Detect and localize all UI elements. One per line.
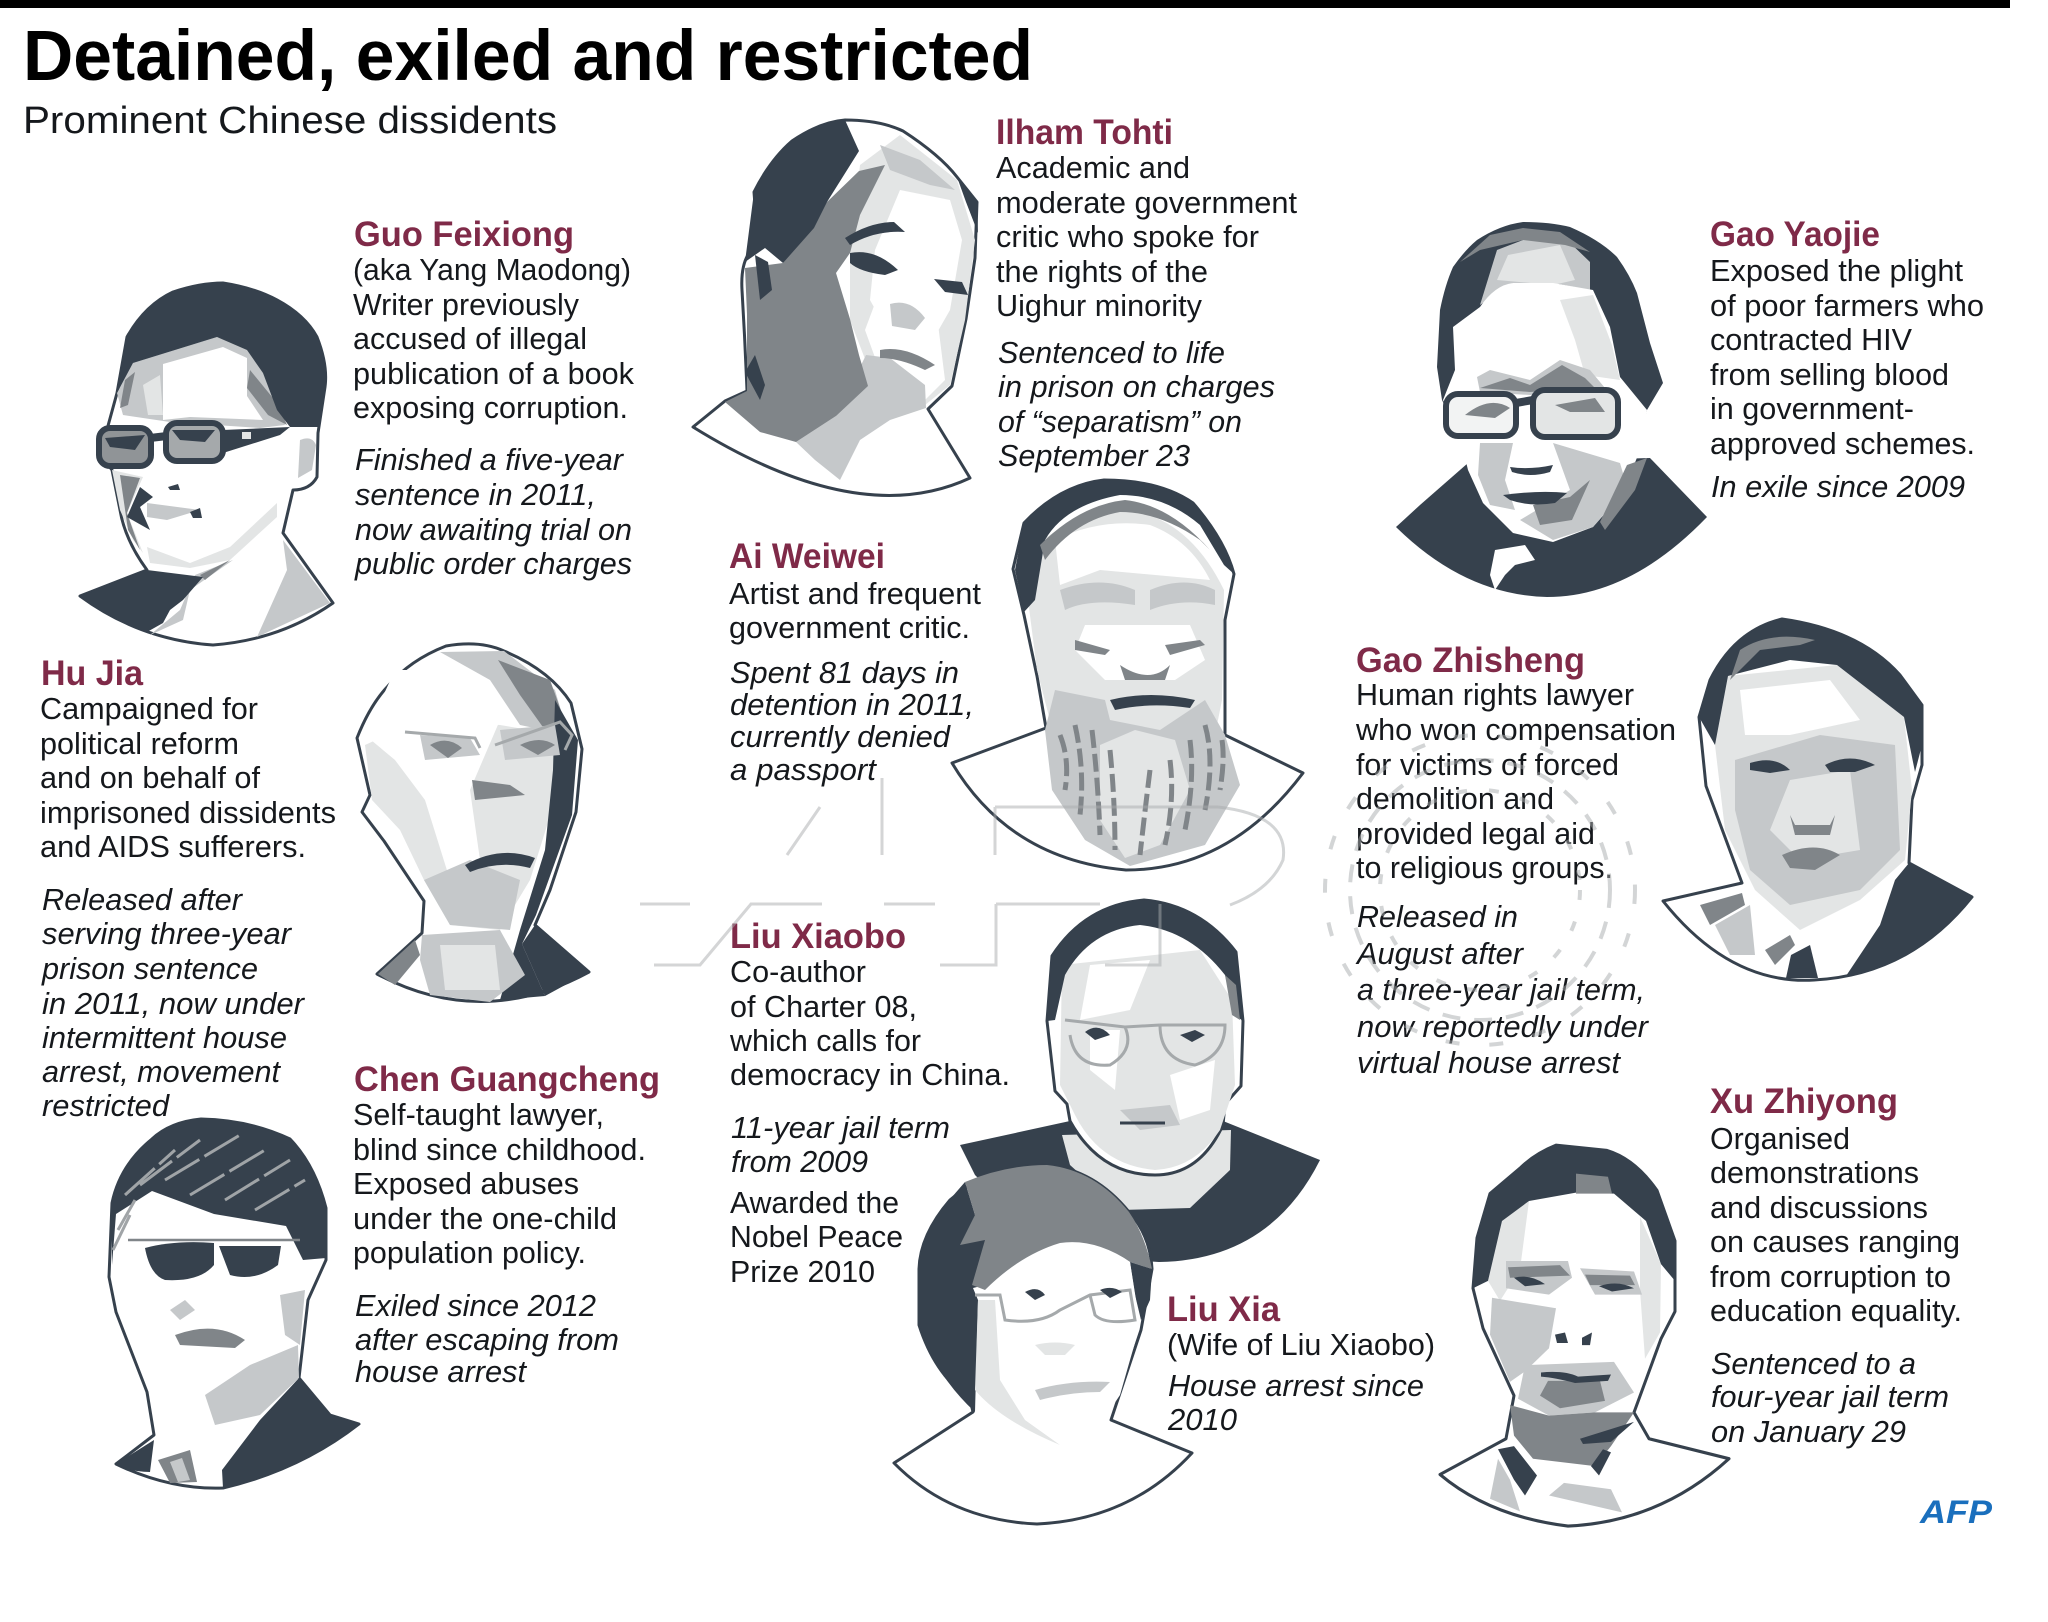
status: virtual house arrest <box>1357 1045 1621 1080</box>
biography: and AIDS sufferers. <box>40 829 306 864</box>
status: in 2011, now under <box>42 986 306 1021</box>
logo: AFP: AFP <box>1919 1494 1993 1530</box>
subtitle: Prominent Chinese dissidents <box>23 100 557 142</box>
biography: Human rights lawyer <box>1356 677 1634 712</box>
biography: from selling blood <box>1710 357 1949 392</box>
award: Nobel Peace <box>730 1219 903 1254</box>
status: Released in <box>1357 899 1518 934</box>
portrait: Ilham Tohti <box>693 120 978 495</box>
panel: Xu Zhiyong <box>1440 1082 1962 1526</box>
biography: who won compensation <box>1355 712 1676 747</box>
status <box>1711 1346 1949 1449</box>
panel: Guo Feixiong <box>80 215 634 645</box>
biography: approved schemes. <box>1710 426 1975 461</box>
biography: contracted HIV <box>1710 322 1912 357</box>
status <box>355 1288 619 1389</box>
name: Ai Weiwei <box>729 537 885 576</box>
biography: Campaigned for <box>40 691 258 726</box>
status: Sentenced to a <box>1711 1346 1916 1381</box>
status: of “separatism” on <box>998 404 1242 439</box>
biography <box>729 576 981 645</box>
status <box>730 655 974 787</box>
biography: (aka Yang Maodong) <box>353 252 631 287</box>
status <box>1355 899 1650 1080</box>
biography: political reform <box>40 726 239 761</box>
panel: Chen Guangcheng <box>109 1060 660 1488</box>
biography: demonstrations <box>1710 1155 1919 1190</box>
biography: accused of illegal <box>353 321 587 356</box>
status: 11-year jail term <box>731 1110 950 1145</box>
panel: Ilham Tohti <box>693 113 1297 495</box>
biography: and discussions <box>1710 1190 1928 1225</box>
panel: Gao Zhisheng <box>1355 619 1972 1080</box>
status: currently denied <box>730 719 952 754</box>
biography: for victims of forced <box>1356 747 1619 782</box>
status: September 23 <box>998 438 1190 473</box>
portrait: Liu Xia <box>894 1165 1192 1524</box>
biography: critic who spoke for <box>996 219 1259 254</box>
status: after escaping from <box>355 1322 619 1357</box>
biography <box>353 1097 646 1270</box>
status: now awaiting trial on <box>355 512 632 547</box>
biography: provided legal aid <box>1356 816 1595 851</box>
status: four-year jail term <box>1711 1379 1949 1414</box>
biography: the rights of the <box>996 254 1208 289</box>
biography: education equality. <box>1710 1293 1962 1328</box>
status: prison sentence <box>41 951 258 986</box>
name: Gao Zhisheng <box>1356 641 1585 680</box>
biography <box>1710 1121 1962 1328</box>
biography <box>1710 253 1984 461</box>
name: Liu Xiaobo <box>730 917 906 956</box>
name: Guo Feixiong <box>354 215 574 254</box>
status: August after <box>1355 936 1525 971</box>
name: Xu Zhiyong <box>1710 1082 1898 1121</box>
watermark: AFP logo and globe <box>640 735 1635 1045</box>
status <box>41 882 306 1123</box>
status: Exiled since 2012 <box>355 1288 596 1323</box>
status: 2010 <box>1167 1402 1237 1437</box>
biography: Self-taught lawyer, <box>353 1097 604 1132</box>
status: arrest, movement <box>42 1054 281 1089</box>
status: sentence in 2011, <box>355 477 596 512</box>
biography: government critic. <box>729 610 970 645</box>
portrait: Liu Xiaobo <box>960 900 1320 1262</box>
biography: on causes ranging <box>1710 1224 1960 1259</box>
portrait: Chen Guangcheng <box>109 1119 359 1488</box>
status: serving three-year <box>42 916 293 951</box>
name: Ilham Tohti <box>996 113 1173 152</box>
panel: Liu Xiaobo <box>729 900 1320 1289</box>
biography: Exposed abuses <box>353 1166 579 1201</box>
status: Finished a five-year <box>355 442 625 477</box>
portrait: Hu Jia <box>357 644 589 1002</box>
status <box>1167 1368 1424 1437</box>
name: Liu Xia <box>1167 1290 1281 1329</box>
biography: population policy. <box>353 1235 586 1270</box>
portrait: Guo Feixiong <box>80 283 333 645</box>
status: a passport <box>730 752 877 787</box>
biography: of Charter 08, <box>730 989 917 1024</box>
status: Spent 81 days in <box>730 655 959 690</box>
title: Detained, exiled and restricted <box>23 17 1033 96</box>
award: Prize 2010 <box>730 1254 875 1289</box>
biography: Academic and <box>996 150 1190 185</box>
biography: which calls for <box>729 1023 921 1058</box>
portrait: Gao Zhisheng <box>1663 619 1972 980</box>
biography: moderate government <box>996 185 1297 220</box>
status: House arrest since <box>1168 1368 1424 1403</box>
biography: Exposed the plight <box>1710 253 1963 288</box>
biography: in government- <box>1710 391 1914 426</box>
biography: of poor farmers who <box>1710 288 1984 323</box>
biography <box>40 691 336 864</box>
name: Gao Yaojie <box>1710 215 1880 254</box>
status: public order charges <box>354 546 632 581</box>
biography: imprisoned dissidents <box>40 795 336 830</box>
biography: Organised <box>1710 1121 1850 1156</box>
biography <box>353 252 634 425</box>
panel: Gao Yaojie <box>1396 215 1984 597</box>
biography <box>996 150 1297 323</box>
status: intermittent house <box>42 1020 287 1055</box>
biography: and on behalf of <box>40 760 260 795</box>
status: restricted <box>42 1088 171 1123</box>
portrait: Ai Weiwei <box>952 480 1303 870</box>
name: Chen Guangcheng <box>354 1060 660 1099</box>
status: detention in 2011, <box>730 687 974 722</box>
status <box>731 1110 950 1179</box>
biography: exposing corruption. <box>353 390 628 425</box>
panel: Liu Xia <box>894 1165 1435 1524</box>
status: house arrest <box>355 1354 527 1389</box>
status: In exile since 2009 <box>1711 469 1965 504</box>
biography: to religious groups. <box>1356 850 1613 885</box>
biography: democracy in China. <box>730 1057 1010 1092</box>
status: in prison on charges <box>998 369 1275 404</box>
status <box>354 442 632 581</box>
biography: Artist and frequent <box>729 576 981 611</box>
biography <box>729 954 1010 1092</box>
panel: Hu Jia <box>40 644 589 1123</box>
biography: publication of a book <box>353 356 634 391</box>
status <box>998 335 1275 473</box>
portrait: Gao Yaojie <box>1396 222 1707 597</box>
status: on January 29 <box>1711 1414 1906 1449</box>
biography: (Wife of Liu Xiaobo) <box>1167 1327 1435 1362</box>
biography: Writer previously <box>353 287 579 322</box>
biography: Co-author <box>730 954 866 989</box>
name: Hu Jia <box>41 654 144 693</box>
status: Sentenced to life <box>998 335 1225 370</box>
panel: Ai Weiwei <box>729 480 1303 870</box>
biography <box>1355 677 1676 885</box>
biography: demolition and <box>1356 781 1554 816</box>
status: from 2009 <box>731 1144 868 1179</box>
portrait: Xu Zhiyong <box>1440 1145 1729 1526</box>
award: Awarded the <box>730 1185 899 1220</box>
biography: under the one-child <box>353 1201 617 1236</box>
status: a three-year jail term, <box>1357 972 1645 1007</box>
status: now reportedly under <box>1357 1009 1650 1044</box>
award <box>730 1185 903 1289</box>
status: Released after <box>42 882 244 917</box>
biography: from corruption to <box>1710 1259 1951 1294</box>
biography: Uighur minority <box>996 288 1202 323</box>
biography: blind since childhood. <box>353 1132 646 1167</box>
